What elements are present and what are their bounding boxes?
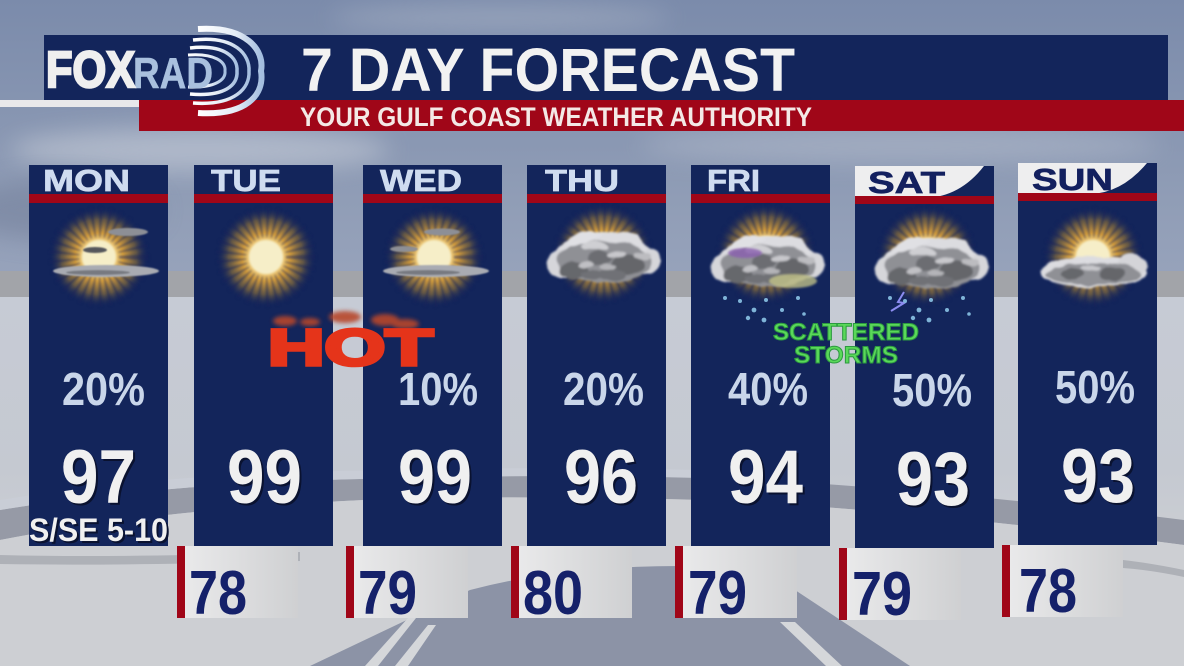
day tab: white [853,166,984,198]
icon: mostly sunny [49,207,159,307]
high temperature: 93 [1061,434,1135,519]
title: 7 DAY FORECAST [301,36,795,104]
low temperature: Friday: 79 [852,560,912,629]
day label: WED: WED [380,163,462,198]
day tab: white [1017,163,1147,194]
precipitation chance: 20% [62,363,145,415]
logo: FOX RAD: RAD [133,49,213,98]
low temperature: Monday: 78 [189,559,247,628]
high temperature: 96 [564,435,638,520]
callout: HOT: HOT [268,319,433,376]
high temperature: 94 [728,435,803,520]
precipitation chance: 10% [398,363,478,415]
header: white accent line [0,100,139,107]
header: navy title bar [44,35,1168,100]
day label: MON: MON [43,163,130,198]
day label: FRI: FRI [707,163,760,198]
icon: sunny [216,207,316,307]
callout: scattered storms: SCATTERED [773,319,919,346]
logo: FOX RAD: FOX [46,41,135,98]
high temperature: 97 [61,435,136,520]
low temperature: Thursday [675,546,797,628]
low temperature: Monday [177,546,298,628]
day label: SAT: SAT [868,165,945,200]
panel: Wednesday [363,163,502,546]
logo: FOX RAD [46,29,262,113]
icon: storm cloud [874,206,990,322]
header: red subtitle bar [139,100,1184,131]
low temperature: Friday [839,548,961,629]
callout: scattered storms: STORMS [794,342,898,369]
panel: Tuesday [194,163,333,546]
precipitation chance: 20% [563,363,644,415]
low temperature: Tuesday [346,546,468,628]
wind: S/SE 5-10 [29,512,168,548]
low temperature: Thursday: 79 [688,559,747,628]
callout: scattered storms [773,319,919,369]
icon: mostly cloudy [546,204,662,304]
panel: Monday [29,163,168,548]
precipitation chance: 50% [892,364,972,416]
high temperature: 99 [398,435,472,520]
low temperature: Tuesday: 79 [358,559,417,628]
day label: THU: THU [545,163,619,198]
panel: Thursday [527,163,666,546]
day label: SUN: SUN [1032,162,1113,197]
panel: Friday [691,163,830,546]
high temperature: 93 [896,437,970,522]
icon: partly cloudy [1040,207,1148,307]
panel: Saturday [853,165,994,548]
icon: storm cloud [710,204,826,322]
subtitle: YOUR GULF COAST WEATHER AUTHORITY [300,102,812,132]
low temperature: Wednesday: 80 [523,559,583,628]
icon: mostly sunny [383,207,489,307]
low temperature: Saturday: 78 [1019,557,1077,626]
low temperature: Wednesday [511,546,632,628]
panel: Sunday [1017,162,1157,545]
callout: HOT [268,311,433,376]
precipitation chance: 40% [728,363,808,415]
precipitation chance: 50% [1055,361,1135,413]
low temperature: Saturday [1002,545,1123,626]
day label: TUE: TUE [211,163,281,198]
high temperature: 99 [227,435,302,520]
